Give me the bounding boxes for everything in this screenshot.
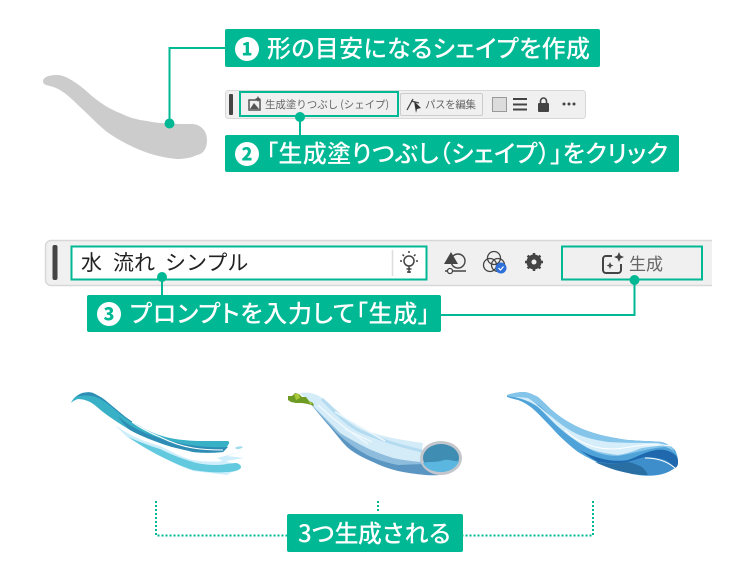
prompt input: 水 [81,247,102,277]
toolbar: prompt bar [46,240,712,286]
icon: light bulb [400,251,418,273]
toolbar grip [229,94,233,115]
edit path button [400,94,482,116]
result 3: layered blue wave [507,392,678,476]
icon: style reference [444,252,466,274]
step 2 label: 「生成塗りつぶし（シェイプ）」をクリック [266,134,668,169]
prompt input [72,246,426,280]
step 3 label: 3 [104,300,114,326]
step 1 label: 形の目安になるシェイプを作成 [267,29,590,64]
prompt input: シンプル [165,247,248,277]
result label: 3つ生成される [298,514,452,549]
icon: color circles with check badge [484,252,506,274]
icon: stroke lines [513,99,527,110]
step 2 label: 2 [242,140,253,166]
icon: settings gear [525,253,543,271]
icon: more dots [562,102,576,106]
gray guide shape [43,75,207,159]
step 3 label: プロンプトを入力して「生成」 [130,294,430,329]
generative fill shape button [240,92,398,116]
edit path button: パスを編集 [425,97,476,112]
generative fill shape button: 生成塗りつぶし (シェイプ) [265,97,389,112]
prompt input: 流れ [113,247,155,277]
result 2: water pipe [288,393,462,475]
generate button: 生成 [629,250,663,275]
icon: lock [538,98,549,112]
step 1 label: 1 [242,36,252,62]
connector: step 1 [164,48,225,128]
connector: step 3 to generate button [441,275,640,315]
toolbar: shape context bar [226,90,586,118]
generate button [562,246,702,280]
dotted bracket [156,501,593,536]
icon: fill swatch [492,98,506,112]
connector: step 3 to prompt [157,272,167,295]
toolbar grip [52,245,58,280]
connector: step 2 [295,112,305,135]
result 1: water stream [71,392,244,475]
